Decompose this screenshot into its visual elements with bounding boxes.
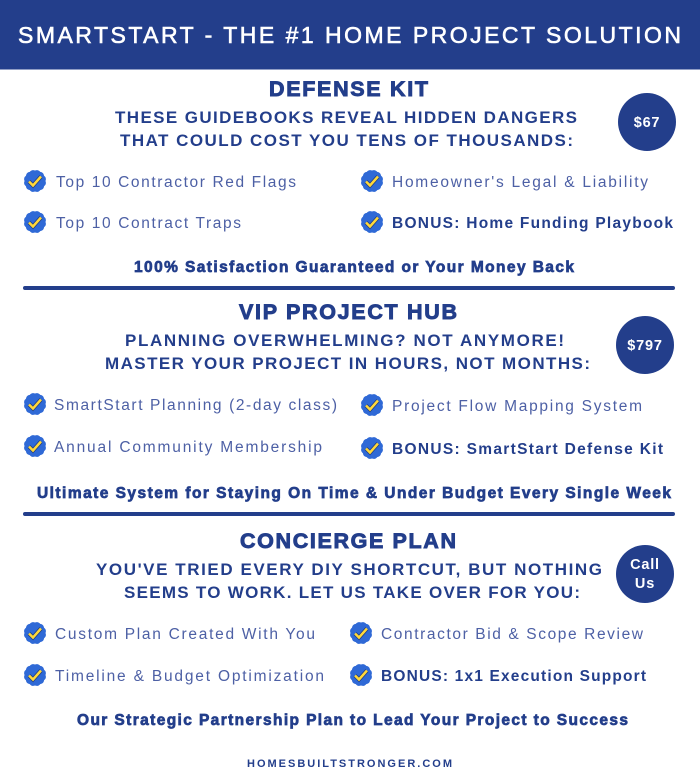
subheading: Defense Kit	[115, 108, 577, 150]
subheading: Concierge Plan: SEEMS TO WORK. LET US TAKE OVER FOR YOU:	[124, 583, 580, 602]
list item: Bonus SmartStart Defense Kit: BONUS: SmartStart Defense Kit	[392, 441, 663, 458]
list item: Homeowner's Legal & Liability	[361, 170, 648, 192]
list item: Contractor Bid & Scope Review: Contractor Bid & Scope Review	[381, 626, 644, 643]
footer website: HOMESBUILTSTRONGER.COM	[247, 758, 452, 770]
list item: Top 10 Contractor Red Flags: Top 10 Contractor Red Flags	[56, 174, 296, 191]
subheading: VIP Project Hub	[105, 331, 590, 373]
list item: Custom Plan Created With You: Custom Plan Created With You	[55, 626, 315, 643]
header banner	[0, 0, 700, 70]
subheading: Defense Kit: THESE GUIDEBOOKS REVEAL HIDDEN DANGERS	[115, 108, 577, 127]
list item: Project Flow Mapping System	[361, 394, 642, 416]
subheading: Concierge Plan: YOU'VE TRIED EVERY DIY SHORTCUT, BUT NOTHING	[96, 560, 602, 579]
panel: Concierge Plan	[24, 529, 674, 729]
price badge: Call Us	[616, 545, 674, 603]
list item: Project Flow Mapping System: Project Flow Mapping System	[392, 398, 642, 415]
partnership tagline: Our Strategic Partnership Plan to Lead Your Project to Success	[77, 712, 628, 729]
subheading: Defense Kit: THAT COULD COST YOU TENS OF THOUSANDS:	[120, 131, 573, 150]
list item: Timeline & Budget Optimization: Timeline & Budget Optimization	[55, 668, 324, 685]
price badge: $67: $67	[634, 115, 660, 131]
list item: Top 10 Contractor Red Flags	[24, 170, 296, 192]
list item: SmartStart Planning: SmartStart Planning (2-day class)	[54, 397, 337, 414]
panel: Defense Kit	[24, 77, 676, 276]
price badge: $797: $797	[627, 338, 663, 354]
list item: Top 10 Contract Traps	[24, 211, 241, 233]
price badge: $67	[618, 93, 676, 151]
price badge: $797	[616, 316, 674, 374]
list item: Bonus 1x1 Execution Support: BONUS: 1x1 Execution Support	[381, 668, 646, 685]
list item: Homeowner's Legal & Liability: Homeowner's Legal & Liability	[392, 174, 648, 191]
panel: VIP Project Hub	[24, 300, 674, 502]
subheading: Concierge Plan	[96, 560, 602, 602]
list item: Top 10 Contract Traps: Top 10 Contract Traps	[56, 215, 241, 232]
heading: VIP Project Hub: VIP PROJECT HUB	[239, 300, 457, 324]
list item: Bonus Home Funding Playbook: BONUS: Home Funding Playbook	[392, 215, 673, 232]
heading: Defense Kit: DEFENSE KIT	[269, 77, 428, 101]
subheading: VIP Project Hub: PLANNING OVERWHELMING? NOT ANYMORE!	[125, 331, 564, 350]
system tagline: Ultimate System for Staying On Time & Under Budget Every Single Week	[37, 485, 671, 502]
price badge: Call Us: Call	[630, 557, 660, 573]
title: SMARTSTART - THE #1 HOME PROJECT SOLUTION	[18, 22, 681, 48]
heading: Concierge Plan: CONCIERGE PLAN	[240, 529, 456, 553]
list item: Annual Community Membership: Annual Community Membership	[54, 439, 322, 456]
subheading: VIP Project Hub: MASTER YOUR PROJECT IN HOURS, NOT MONTHS:	[105, 354, 590, 373]
guarantee tagline: 100% Satisfaction Guaranteed or Your Money Back	[134, 259, 574, 276]
price badge: Call Us: Us	[635, 576, 655, 592]
